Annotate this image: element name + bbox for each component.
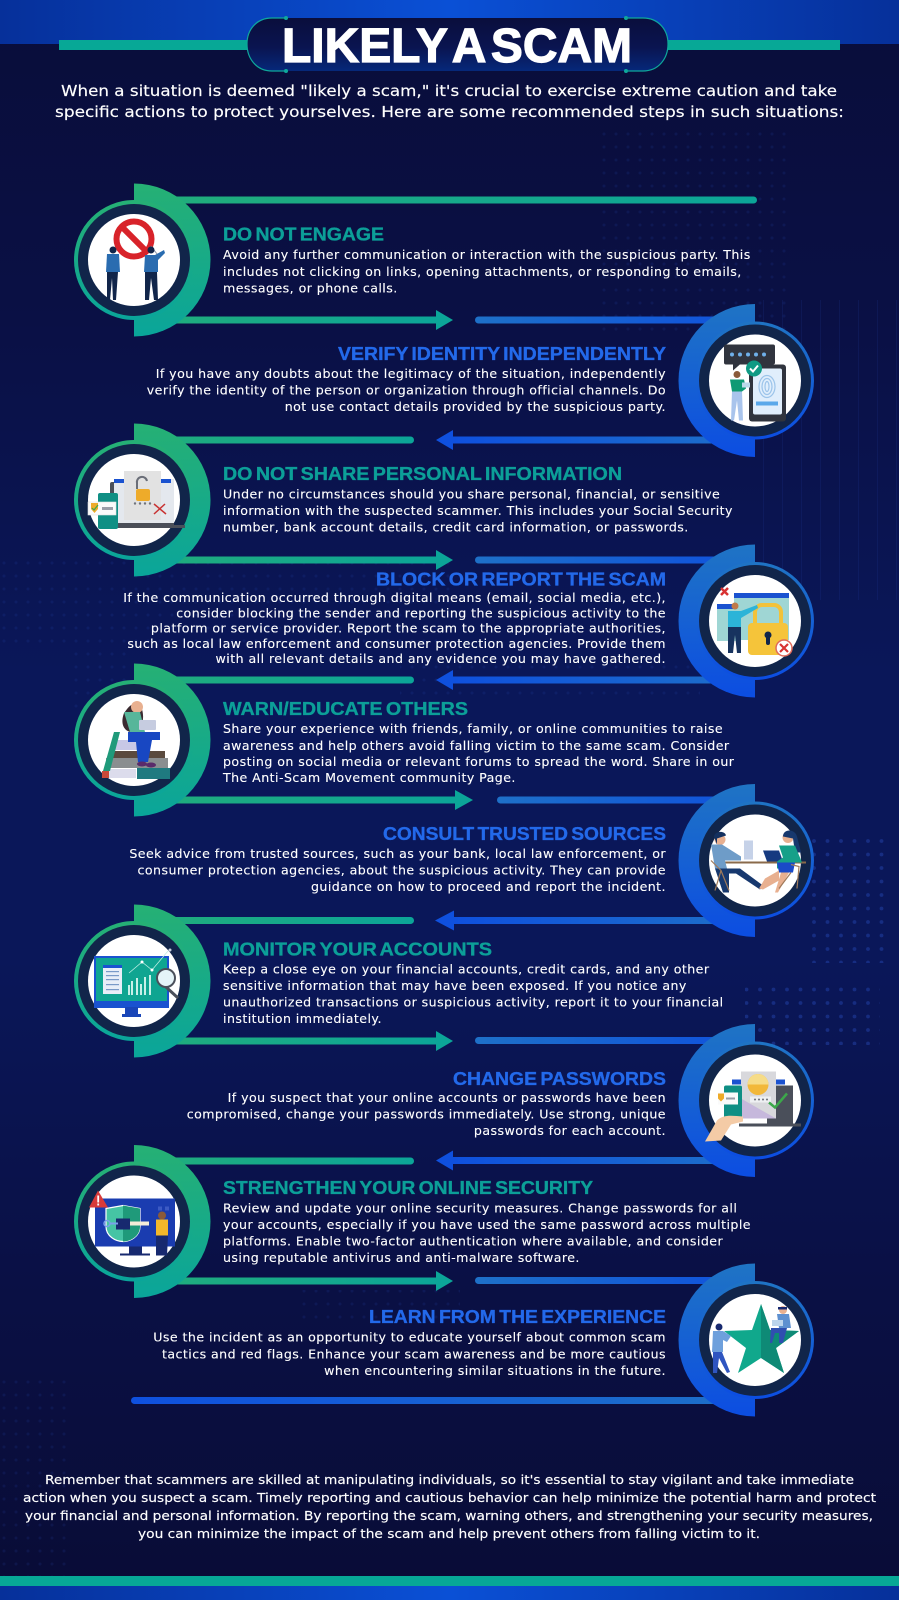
body text (223, 962, 724, 1026)
body text: when encountering similar situations in the future. (324, 1363, 666, 1378)
body text (123, 590, 666, 666)
heading: DO NOT SHARE PERSONAL INFORMATION (223, 463, 622, 484)
top bar (134, 676, 414, 684)
header teal bars (59, 40, 840, 50)
closing text: action when you suspect a scam. Timely reporting and cautious behavior can help minimize the potential harm and protect (23, 1490, 876, 1505)
panel: block or report the scam (123, 544, 814, 698)
badge with icon: laptop and padlock (74, 424, 210, 576)
top bar (134, 1158, 414, 1164)
body text: information with the suspected scammer. This includes your Social Security (223, 503, 733, 518)
heading: WARN/EDUCATE OTHERS (223, 698, 468, 719)
body text (147, 366, 666, 414)
body text: Share your experience with friends, family, or online communities to raise (223, 721, 723, 736)
body text: The Anti-Scam Movement community Page. (222, 770, 516, 785)
body text: posting on social media or relevant forums to spread the word. Share in our (223, 754, 735, 769)
body text: includes not clicking on links, opening attachments, or responding to emails, (223, 264, 742, 279)
footer blue band (0, 1586, 899, 1600)
body text (129, 846, 666, 894)
body text (223, 247, 751, 296)
body text: If the communication occurred through digital means (email, social media, etc.), (123, 590, 666, 605)
body text: consumer protection agencies, about the suspicious activity. They can provide (138, 863, 666, 878)
panel: consult trusted sources (129, 784, 814, 937)
body text: guidance on how to proceed and report the incident. (311, 879, 666, 894)
bottom arrow (436, 1150, 755, 1170)
body text: platforms. Enable two-factor authentication where available, and consider (223, 1234, 723, 1249)
heading: VERIFY IDENTITY INDEPENDENTLY (338, 343, 666, 364)
body text (222, 721, 735, 785)
panel: change passwords (187, 1024, 814, 1177)
bottom arrow (436, 430, 755, 450)
body text: If you have any doubts about the legitimacy of the situation, independently (156, 366, 666, 381)
body text: If you suspect that your online accounts or passwords have been (228, 1090, 666, 1105)
body text: not use contact details provided by the suspicious party. (285, 399, 666, 414)
top bar (475, 1037, 755, 1044)
bottom arrow (134, 550, 453, 570)
panel: learn from the experience (131, 1264, 814, 1416)
closing text (23, 1472, 876, 1541)
top bar (134, 436, 414, 444)
body text: your accounts, especially if you have used the same password across multiple (223, 1217, 751, 1232)
body text: platform or service provider. Report the scam to the appropriate authorities, (151, 621, 666, 636)
bottom arrow (134, 1271, 453, 1291)
bottom arrow (436, 670, 755, 690)
badge with icon: fingerprint phone (678, 304, 814, 457)
heading: BLOCK OR REPORT THE SCAM (376, 569, 666, 590)
body text: institution immediately. (223, 1011, 382, 1026)
body text: consider blocking the sender and reporting the suspicious activity to the (176, 606, 666, 620)
body text: awareness and help others avoid falling victim to the same scam. Consider (223, 738, 730, 753)
body text (223, 486, 733, 534)
badge with icon: shield on monitor (74, 1145, 210, 1298)
badge with icon: no sign and two men (74, 184, 210, 336)
bottom arrow (435, 910, 755, 930)
heading: STRENGTHEN YOUR ONLINE SECURITY (223, 1177, 593, 1198)
heading: CONSULT TRUSTED SOURCES (383, 823, 666, 844)
body text: Seek advice from trusted sources, such as your bank, local law enforcement, or (129, 846, 666, 861)
badge with icon: laptop, phone and hand (678, 1024, 814, 1177)
panel: monitor your accounts (74, 904, 724, 1058)
body text: number, bank account details, credit card information, or passwords. (223, 520, 689, 534)
body text: such as local law enforcement and consumer protection agencies. Provide them (127, 636, 666, 651)
heading: LEARN FROM THE EXPERIENCE (369, 1306, 666, 1327)
top bar (134, 196, 757, 204)
body text: sensitive information that may have been exposed. If you notice any (223, 978, 687, 993)
body text: compromised, change your passwords immediately. Use strong, unique (187, 1107, 666, 1122)
badge with icon: star and two people (678, 1264, 814, 1416)
panel: do not engage (74, 184, 757, 336)
panel: verify identity independently (147, 304, 814, 457)
heading: DO NOT ENGAGE (223, 224, 384, 245)
closing text: you can minimize the impact of the scam and help prevent others from falling victim to it. (138, 1526, 760, 1541)
body text: passwords for each account. (474, 1123, 666, 1138)
bottom arrow (134, 310, 453, 330)
body text: using reputable antivirus and anti-malware software. (223, 1250, 580, 1265)
body text: Under no circumstances should you share personal, financial, or sensitive (223, 486, 720, 502)
body text: Review and update your online security measures. Change passwords for all (223, 1200, 737, 1215)
panel: do not share personal information (74, 424, 733, 576)
closing text: your financial and personal information. By reporting the scam, warning others, and strengthening your security measures, (25, 1508, 873, 1523)
top bar (497, 796, 755, 804)
heading: MONITOR YOUR ACCOUNTS (223, 939, 492, 960)
top bar (475, 316, 755, 324)
panel: warn/educate others (74, 664, 735, 816)
panel: strengthen your online security (74, 1145, 751, 1298)
heading: CHANGE PASSWORDS (453, 1068, 666, 1089)
top bar (134, 917, 414, 924)
badge with icon: two people at a desk (678, 784, 814, 937)
bottom arrow (134, 790, 473, 810)
body text: Avoid any further communication or interaction with the suspicious party. This (223, 247, 751, 262)
top bar (475, 1277, 755, 1284)
intro text: specific actions to protect yourselves. Here are some recommended steps in such situations: (55, 104, 844, 121)
header band (0, 0, 899, 44)
body text (153, 1330, 666, 1378)
title pill (247, 16, 668, 73)
top bar (475, 556, 755, 564)
body text: verify the identity of the person or organization through official channels. Do (147, 382, 666, 398)
bottom bar (131, 1397, 755, 1404)
body text: unauthorized transactions or suspicious activity, report it to your financial (223, 995, 724, 1010)
body text: Keep a close eye on your financial accounts, credit cards, and any other (223, 962, 710, 976)
intro text: When a situation is deemed "likely a scam," it's crucial to exercise extreme caution and take (61, 83, 837, 100)
intro text (55, 83, 844, 121)
closing text: Remember that scammers are skilled at manipulating individuals, so it's essential to stay vigilant and take immediate (45, 1472, 854, 1487)
bottom arrow (134, 1031, 453, 1051)
title: LIKELY A SCAM (282, 20, 632, 73)
body text: with all relevant details and any evidence you may have gathered. (216, 651, 666, 666)
footer teal bar (0, 1576, 899, 1586)
body text: tactics and red flags. Enhance your scam awareness and be more cautious (162, 1346, 666, 1361)
badge with icon: monitor with chart and magnifier (74, 904, 210, 1058)
badge with icon: woman on books (74, 664, 210, 816)
body text: Use the incident as an opportunity to educate yourself about common scam (153, 1330, 666, 1345)
body text: messages, or phone calls. (223, 280, 398, 296)
body text (187, 1090, 666, 1138)
body text (223, 1200, 751, 1265)
badge with icon: padlock and window (678, 544, 814, 698)
